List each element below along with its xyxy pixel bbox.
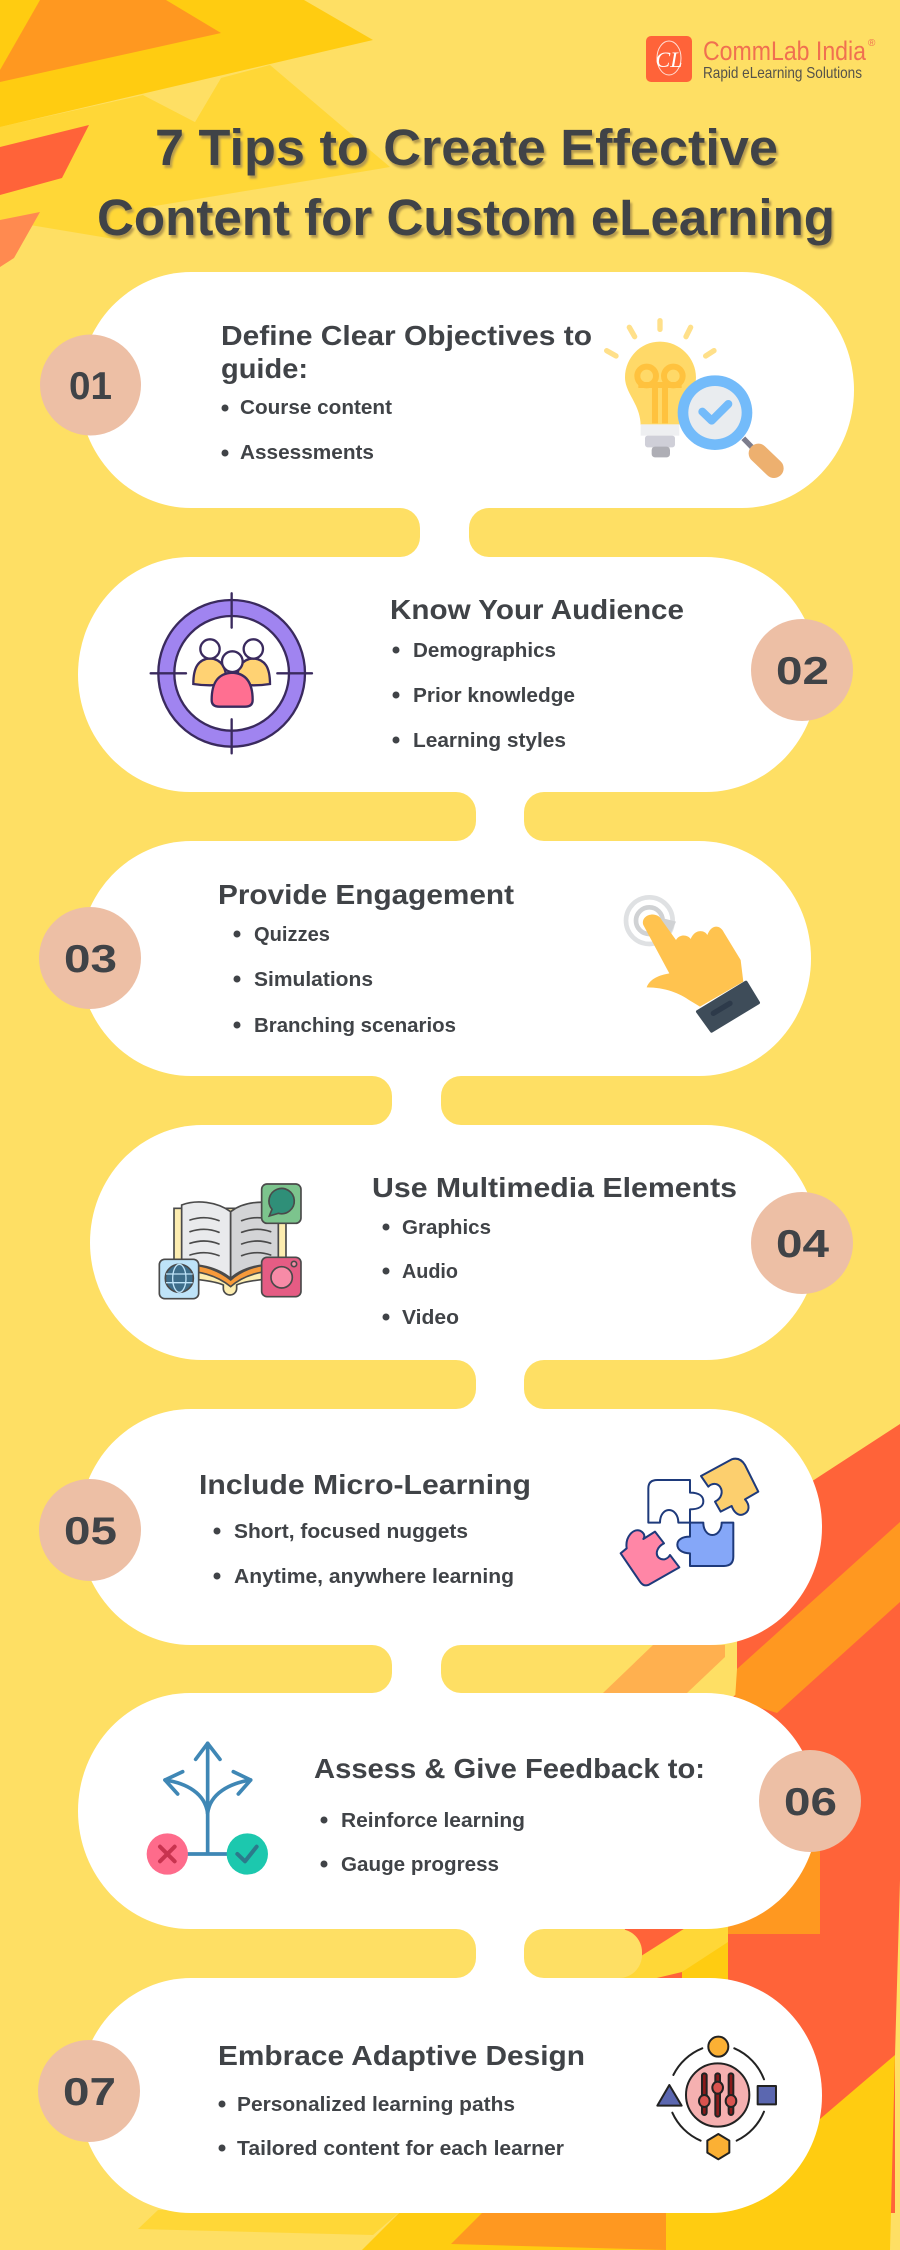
panel: tip 02 know your audience — [78, 557, 853, 792]
panel: tip 01 define clear objectives — [40, 272, 854, 508]
bullets 05 — [214, 1520, 514, 1588]
bullets 06: Reinforce learning — [341, 1809, 525, 1832]
bullets 04: Audio — [402, 1260, 458, 1283]
logo: CommLab India — [646, 36, 876, 82]
bullets 06: Gauge progress — [341, 1853, 499, 1876]
bullets 03 — [234, 923, 456, 1037]
icon: light bulb with magnifier — [607, 321, 774, 468]
heading 05: Include Micro-Learning — [199, 1469, 531, 1500]
number badge 04 — [751, 1192, 853, 1294]
logo: CommLab India: CL — [656, 47, 682, 72]
number badge 01 — [40, 334, 141, 436]
number badge 03 — [39, 907, 141, 1009]
logo: CommLab India: Rapid eLearning Solutions — [703, 65, 862, 82]
icon: adaptive settings with shapes — [657, 2037, 776, 2159]
number badge 04: 04 — [776, 1223, 829, 1266]
heading 07: Embrace Adaptive Design — [218, 2040, 585, 2071]
heading 04: Use Multimedia Elements — [372, 1172, 737, 1203]
bullets 03: Quizzes — [254, 923, 330, 946]
bullets 05: Short, focused nuggets — [234, 1520, 468, 1543]
panel: tip 03 provide engagement — [39, 841, 811, 1076]
number badge 06: 06 — [784, 1781, 837, 1824]
bullets 02: Learning styles — [413, 729, 566, 752]
bullets 06 — [320, 1809, 525, 1876]
bullets 03: Simulations — [254, 968, 373, 991]
bullets 01: Course content — [240, 396, 392, 419]
number badge 06 — [759, 1750, 861, 1852]
icon: pointing hand — [626, 897, 758, 1031]
heading 01: Define Clear Objectives to — [221, 320, 592, 351]
bullets 02 — [392, 639, 575, 752]
bullets 07: Tailored content for each learner — [237, 2137, 564, 2160]
bullets 04: Graphics — [402, 1216, 491, 1239]
bullets 02: Demographics — [413, 639, 556, 662]
panel: tip 06 assess and give feedback — [78, 1693, 861, 1929]
bullets 07: Personalized learning paths — [237, 2093, 515, 2116]
icon: branching arrows with cross and check — [147, 1743, 268, 1875]
panel: tip 04 use multimedia elements — [90, 1125, 853, 1360]
logo: CommLab India: CommLab India — [703, 36, 867, 66]
bullets 04 — [382, 1216, 491, 1329]
heading 03: Provide Engagement — [218, 879, 514, 910]
number badge 05 — [39, 1479, 141, 1581]
heading 01: guide: — [221, 353, 308, 384]
heading 01 — [221, 320, 592, 384]
number badge 07: 07 — [63, 2071, 116, 2114]
number badge 03: 03 — [64, 938, 117, 981]
title — [97, 119, 835, 246]
number badge 02 — [751, 619, 853, 721]
bullets 05: Anytime, anywhere learning — [234, 1565, 514, 1588]
bullets 04: Video — [402, 1306, 459, 1329]
bullets 02: Prior knowledge — [413, 684, 575, 707]
number badge 07 — [38, 2040, 140, 2142]
bullets 01: Assessments — [240, 441, 374, 464]
number badge 01: 01 — [69, 365, 112, 408]
number badge 05: 05 — [64, 1510, 117, 1553]
icon: audience target — [151, 593, 312, 753]
bullets 01 — [222, 396, 392, 464]
panel: tip 07 embrace adaptive design — [38, 1978, 822, 2213]
title: 7 Tips to Create Effective — [155, 119, 778, 176]
panel: tip 05 include micro-learning — [39, 1409, 822, 1645]
heading 02: Know Your Audience — [390, 594, 684, 625]
bullets 03: Branching scenarios — [254, 1014, 456, 1037]
icon: puzzle pieces — [621, 1459, 758, 1585]
number badge 02: 02 — [776, 650, 829, 693]
logo: CommLab India: ® — [868, 38, 876, 49]
icon: open book with media tiles — [159, 1184, 301, 1299]
title: Content for Custom eLearning — [97, 189, 835, 246]
connectors between tip panels — [372, 508, 642, 1978]
heading 06: Assess & Give Feedback to: — [314, 1753, 705, 1784]
bullets 07 — [218, 2093, 564, 2160]
